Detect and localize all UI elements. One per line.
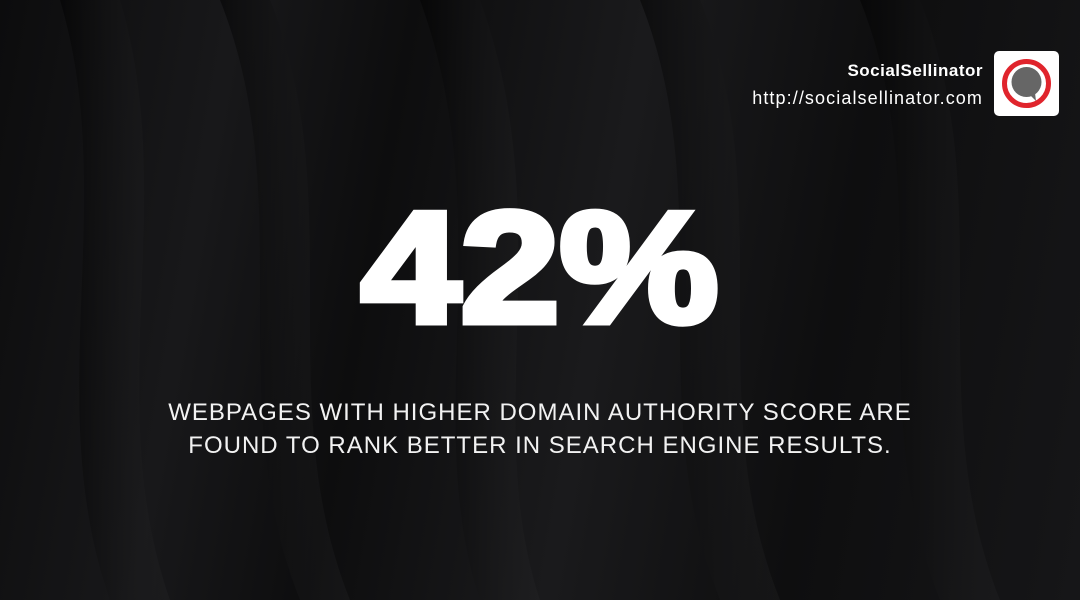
description: WEBPAGES WITH HIGHER DOMAIN AUTHORITY SCORE ARE	[168, 399, 912, 426]
icon: logo	[994, 51, 1059, 116]
description	[168, 399, 912, 459]
big stat: 42%	[361, 180, 718, 356]
brand url: http://socialsellinator.com	[752, 88, 983, 108]
brand name: SocialSellinator	[847, 61, 983, 80]
description: FOUND TO RANK BETTER IN SEARCH ENGINE RESULTS.	[188, 432, 892, 459]
